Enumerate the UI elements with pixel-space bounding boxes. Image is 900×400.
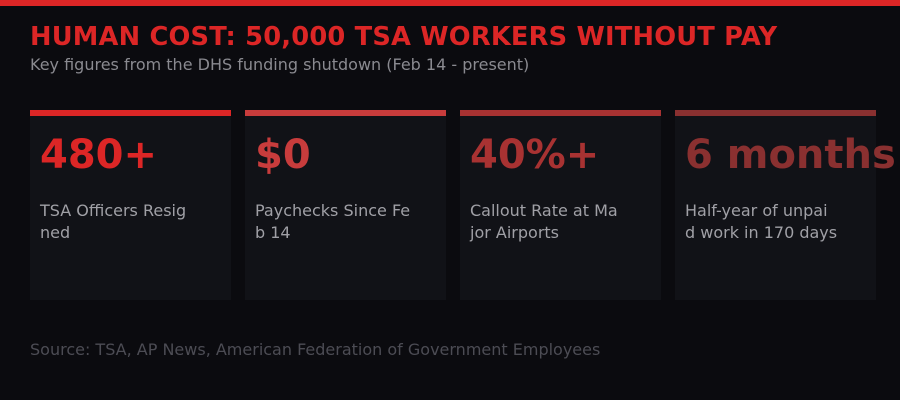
card: paychecks: Paychecks Since Fe — [255, 201, 410, 220]
card: six months: d work in 170 days — [685, 223, 837, 242]
card: six months: 6 months — [685, 132, 896, 178]
source: Source: TSA, AP News, American Federation of Government Employees — [30, 340, 600, 359]
card: officers resigned: TSA Officers Resig — [40, 201, 186, 220]
card: callout rate: 40%+ — [470, 132, 599, 178]
card: paychecks: b 14 — [255, 223, 291, 242]
top accent bar — [0, 0, 900, 6]
title: HUMAN COST: 50,000 TSA WORKERS WITHOUT PAY — [30, 22, 777, 52]
card: officers resigned — [30, 110, 231, 300]
subtitle: Key figures from the DHS funding shutdown (Feb 14 - present) — [30, 55, 529, 74]
card: six months: Half-year of unpai — [685, 201, 828, 220]
card: callout rate: jor Airports — [470, 223, 559, 242]
card: callout rate: Callout Rate at Ma — [470, 201, 618, 220]
card: officers resigned: 480+ — [40, 132, 157, 178]
card: paychecks: $0 — [255, 132, 311, 178]
card: officers resigned: ned — [40, 223, 70, 242]
card: six months — [675, 110, 876, 300]
card: paychecks — [245, 110, 446, 300]
card: callout rate — [460, 110, 661, 300]
